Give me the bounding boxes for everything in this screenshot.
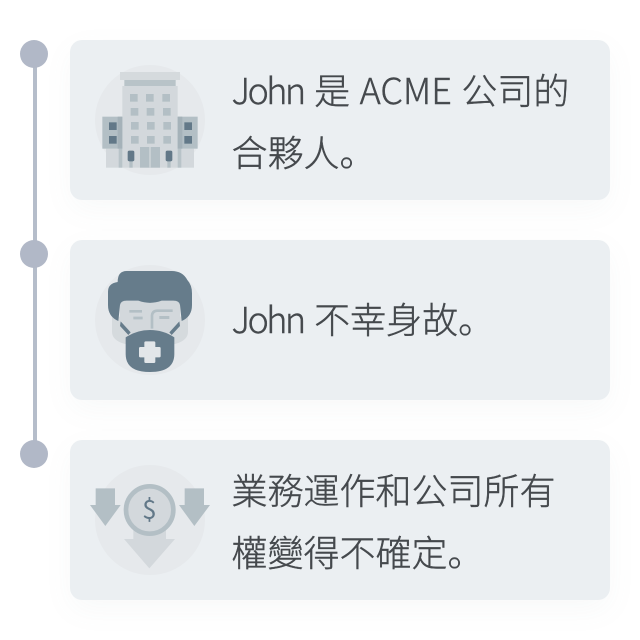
icon: person with medical mask (108, 271, 192, 372)
text: card 3: 業務運作和公司所有 (232, 463, 556, 515)
text: card 1 (232, 63, 569, 177)
panel: card 3 (70, 440, 610, 600)
text: card 3: 權變得不確定。 (232, 525, 484, 577)
timeline dot 2 (20, 240, 48, 268)
timeline line (33, 54, 36, 454)
text: card 2: John 不幸身故。 (232, 292, 494, 344)
timeline dot 1 (20, 40, 48, 68)
panel: card 1 (70, 40, 610, 200)
icon: office building (102, 72, 198, 168)
text: card 1: John 是 ACME 公司的 (232, 63, 569, 115)
icon: falling money arrows (90, 484, 210, 568)
icon: falling money arrows: $ (142, 490, 157, 527)
timeline dot 3 (20, 440, 48, 468)
text: card 1: 合夥人。 (232, 125, 376, 177)
text: card 3 (232, 463, 556, 577)
panel: card 2 (70, 240, 610, 400)
